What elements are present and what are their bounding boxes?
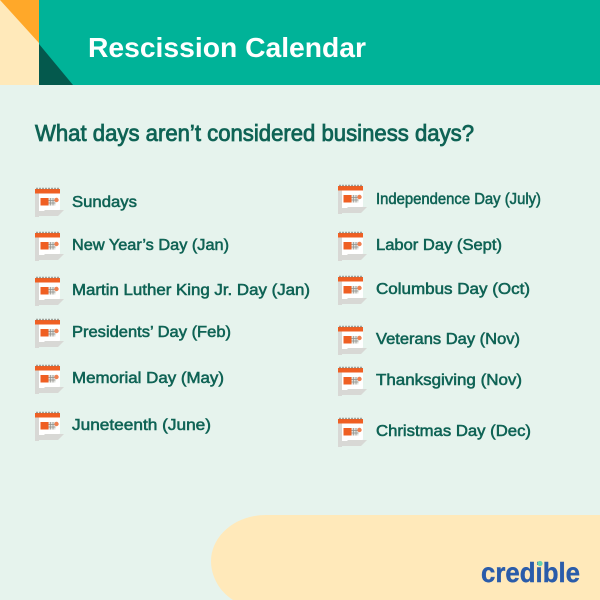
icon: calendar: [35, 365, 64, 394]
item: Thanksgiving: Thanksgiving (Nov): [376, 372, 522, 389]
icon: calendar: [338, 185, 367, 214]
logo: credible: credible: [481, 557, 580, 588]
right column list: [338, 185, 541, 447]
item: Veterans Day: Veterans Day (Nov): [376, 331, 520, 348]
header corner: cream panel: [0, 0, 39, 85]
icon: calendar: [338, 367, 367, 396]
icon: calendar: [35, 232, 64, 261]
item: Martin Luther King Jr. Day: Martin Luther King Jr. Day (Jan): [72, 282, 310, 299]
icon: calendar: [35, 188, 64, 217]
title: Rescission Calendar: [88, 32, 366, 63]
item: Independence Day: Independence Day (July): [376, 191, 541, 208]
item: Presidents' Day: Presidents’ Day (Feb): [72, 324, 231, 341]
icon: calendar: [35, 319, 64, 348]
item: Columbus Day: Columbus Day (Oct): [376, 281, 530, 298]
icon: calendar: [338, 418, 367, 447]
footer cream panel: [211, 515, 600, 600]
left column list: [35, 188, 310, 441]
item: Memorial Day: Memorial Day (May): [72, 370, 224, 387]
icon: calendar: [338, 232, 367, 261]
item: New Year's Day: New Year’s Day (Jan): [72, 237, 229, 254]
header banner: [0, 0, 600, 85]
header corner: dark green triangle: [39, 44, 73, 85]
icon: calendar: [338, 276, 367, 305]
heading: What days aren’t considered business days?: [35, 120, 474, 146]
item: Sundays: Sundays: [72, 194, 137, 211]
icon: calendar: [35, 412, 64, 441]
item: Labor Day: Labor Day (Sept): [376, 237, 502, 254]
icon: calendar: [338, 326, 367, 355]
item: Juneteenth: Juneteenth (June): [72, 417, 211, 434]
header corner: orange triangle: [0, 0, 39, 43]
icon: calendar: [35, 277, 64, 306]
item: Christmas Day: Christmas Day (Dec): [376, 423, 531, 440]
logo dot: [537, 561, 543, 566]
